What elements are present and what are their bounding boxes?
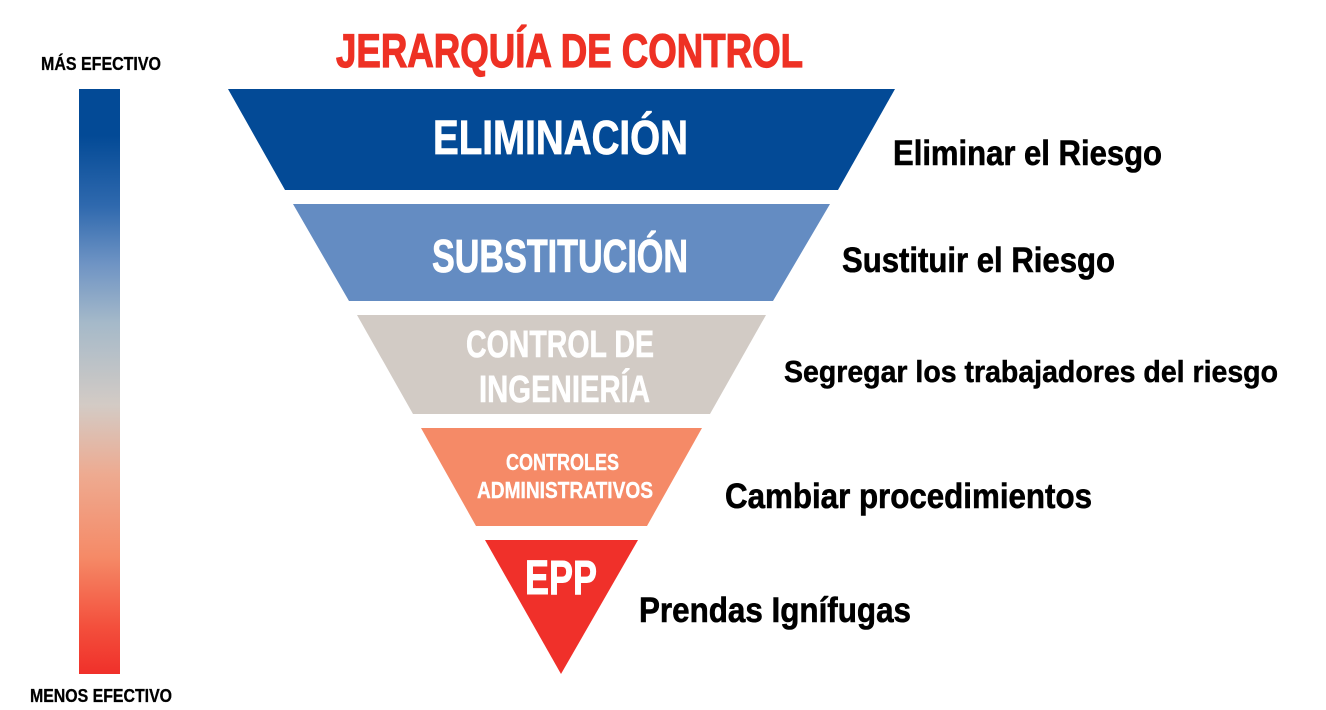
label: most effective: MÁS EFECTIVO bbox=[41, 53, 161, 74]
pyramid tier: eliminación bbox=[228, 89, 895, 190]
pyramid tier: controles administrativos: CONTROLES bbox=[506, 449, 619, 475]
title: JERARQUÍA DE CONTROL bbox=[336, 24, 803, 77]
pyramid tier: substitución bbox=[293, 204, 830, 301]
pyramid tier: control de ingeniería: CONTROL DE bbox=[466, 324, 654, 366]
pyramid tier: EPP bbox=[485, 540, 638, 674]
effectiveness scale bbox=[30, 53, 172, 706]
pyramid tier: controles administrativos bbox=[421, 428, 702, 526]
pyramid tier: controles administrativos: ADMINISTRATIVOS bbox=[477, 477, 653, 503]
pyramid tier: control de ingeniería: INGENIERÍA bbox=[479, 367, 650, 411]
description: segregar: Segregar los trabajadores del riesgo bbox=[784, 354, 1278, 389]
pyramid tier: EPP: EPP bbox=[525, 552, 597, 605]
pyramid tier: control de ingeniería bbox=[357, 315, 766, 414]
label: least effective: MENOS EFECTIVO bbox=[30, 686, 172, 706]
gradient bar bbox=[79, 89, 120, 674]
description: prendas: Prendas Ignífugas bbox=[639, 591, 911, 630]
pyramid tier: substitución: SUBSTITUCIÓN bbox=[432, 230, 688, 282]
description: cambiar: Cambiar procedimientos bbox=[725, 477, 1092, 516]
description: sustituir: Sustituir el Riesgo bbox=[842, 241, 1115, 280]
pyramid tier: eliminación: ELIMINACIÓN bbox=[433, 110, 688, 165]
description: eliminar: Eliminar el Riesgo bbox=[893, 134, 1162, 173]
